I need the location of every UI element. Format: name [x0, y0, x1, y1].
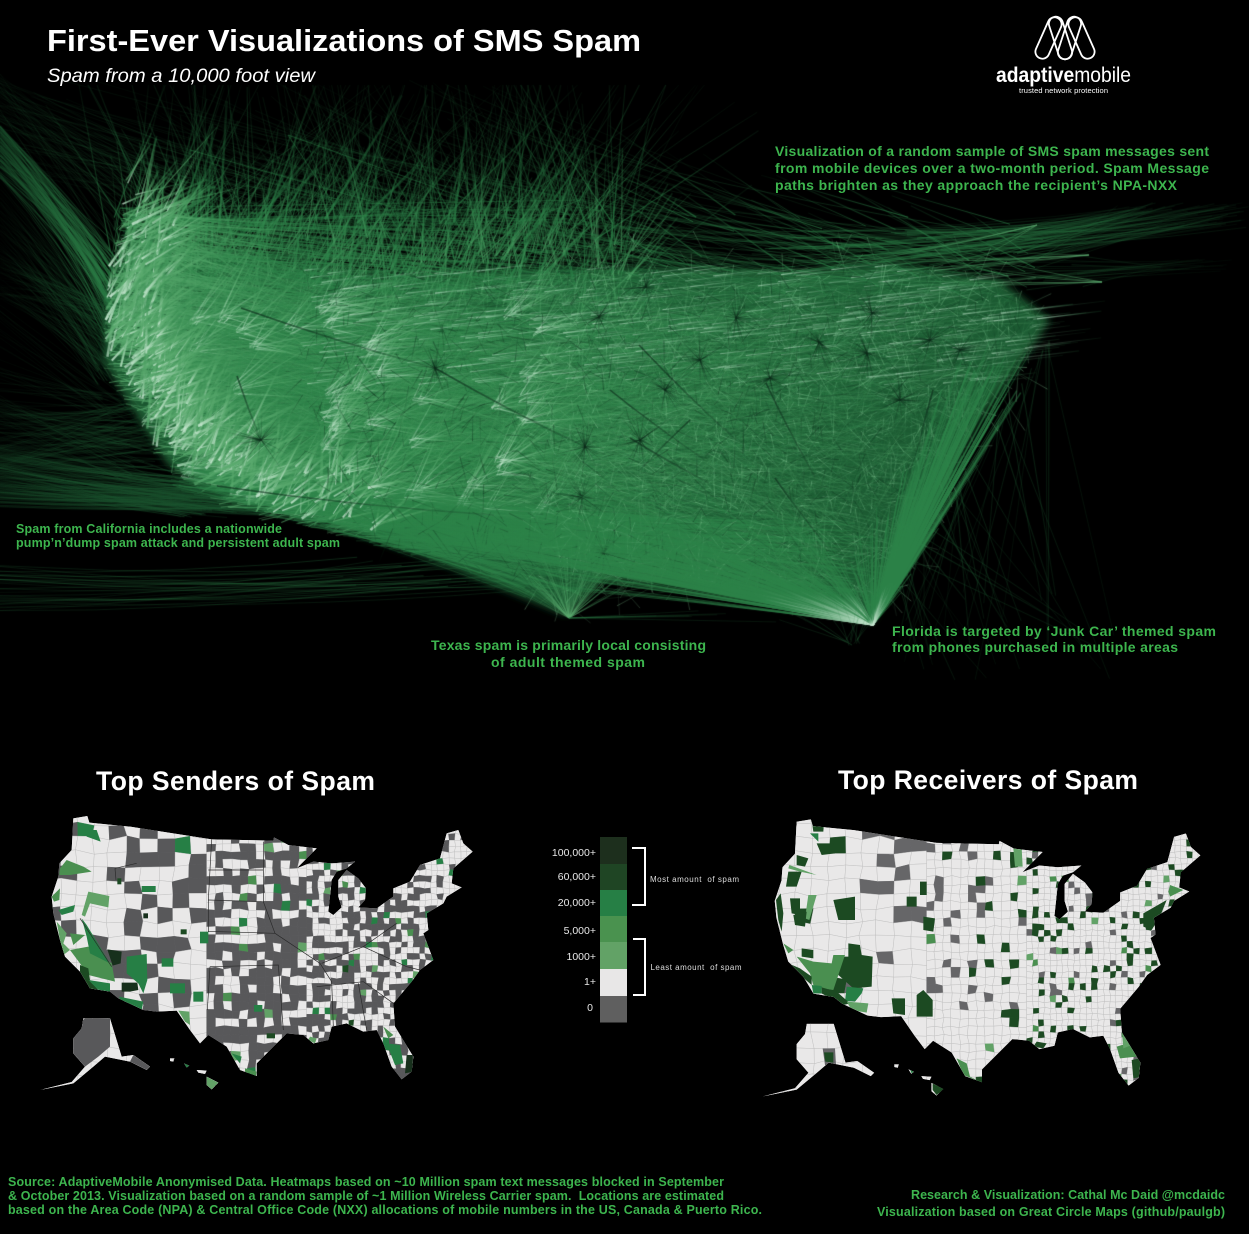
bracket: most amount: [632, 848, 645, 905]
callout: Texas: of adult themed spam: [491, 654, 645, 670]
description text: [775, 143, 1209, 193]
heading: top receivers: Top Receivers of Spam: [838, 765, 1138, 795]
logo wordmark: adaptivemobile: [996, 64, 1131, 87]
footer: credits: Research & Visualization: Cathal Mc Daid @mcdaidc: [911, 1188, 1225, 1202]
legend labels: 1000+: [566, 951, 596, 963]
choropleth map: top senders: [40, 816, 473, 1090]
legend labels: 20,000+: [558, 897, 596, 909]
callout: Texas: Texas spam is primarily local consisting: [431, 637, 706, 653]
footer: source note: based on the Area Code (NPA) & Central Office Code (NXX) allocations of mobile numbers in the US, Canada & Puerto Rico.: [8, 1203, 762, 1217]
network map: great circle spam paths: [0, 74, 1246, 680]
legend labels: 1+: [584, 976, 596, 988]
choropleth map: top receivers: [763, 819, 1200, 1096]
logo: adaptivemobile: [996, 15, 1131, 95]
callout: Florida: [892, 623, 1216, 655]
heading: top senders: Top Senders of Spam: [96, 766, 375, 796]
legend labels: [552, 847, 596, 1014]
title: First-Ever Visualizations of SMS Spam: [47, 23, 641, 58]
description text: Visualization of a random sample of SMS spam messages sent: [775, 143, 1209, 159]
description text: from mobile devices over a two-month period. Spam Message: [775, 160, 1209, 176]
label: least amount of spam: Least amount of spam: [650, 963, 742, 972]
callout: Florida: from phones purchased in multiple areas: [892, 639, 1178, 655]
legend labels: 100,000+: [552, 847, 596, 859]
footer: source note: [8, 1175, 762, 1217]
footer: source note: Source: AdaptiveMobile Anonymised Data. Heatmaps based on ~10 Million spam text messages blocked in September: [8, 1175, 724, 1189]
bracket: least amount: [633, 939, 645, 995]
footer: credits: [877, 1188, 1225, 1219]
legend labels: 60,000+: [558, 871, 596, 883]
callout: California: Spam from California includes a nationwide: [16, 522, 282, 536]
footer: source note: & October 2013. Visualization based on a random sample of ~1 Million Wireless Carrier spam. Locations are estimated: [8, 1189, 724, 1203]
footer: credits: Visualization based on Great Circle Maps (github/paulgb): [877, 1205, 1225, 1219]
callout: Florida: Florida is targeted by ‘Junk Car’ themed spam: [892, 623, 1216, 639]
legend labels: 5,000+: [564, 925, 596, 937]
icon: logo loops: [1033, 15, 1097, 61]
legend colour scale: [600, 837, 627, 1022]
description text: paths brighten as they approach the recipient’s NPA-NXX: [775, 177, 1178, 193]
subtitle: Spam from a 10,000 foot view: [47, 66, 316, 87]
label: most amount of spam: Most amount of spam: [650, 875, 739, 884]
legend labels: 0: [587, 1002, 593, 1014]
callout: Texas: [431, 637, 706, 670]
logo tagline: trusted network protection: [1019, 86, 1108, 95]
callout: California: [16, 522, 340, 550]
legend: [552, 837, 742, 1022]
callout: California: pump’n’dump spam attack and persistent adult spam: [16, 536, 340, 550]
